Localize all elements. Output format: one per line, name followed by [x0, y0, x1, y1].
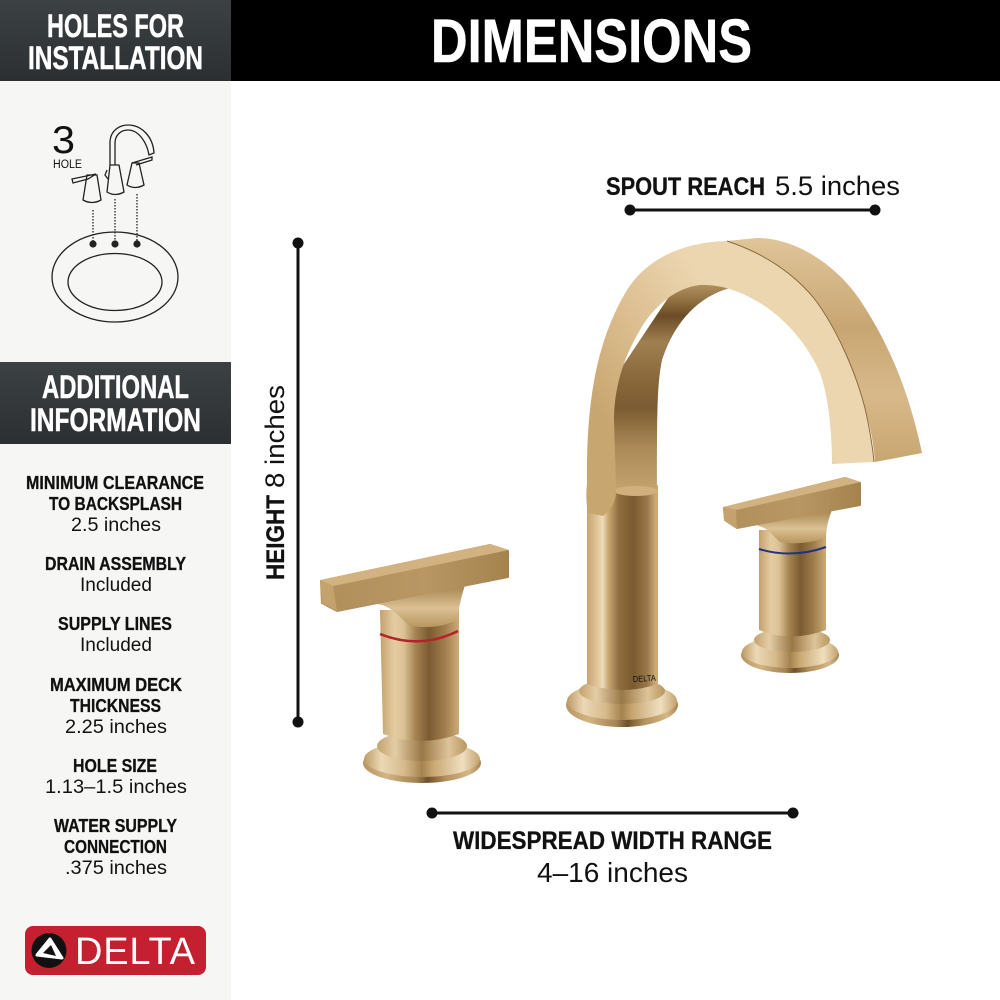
hot handle column: [380, 610, 459, 741]
spec: water supply connection: .375 inches: [65, 858, 167, 879]
spec: drain assembly: Included: [80, 575, 152, 596]
spec: minimum clearance: TO BACKSPLASH: [49, 494, 182, 514]
faucet: hot handle: [320, 544, 509, 783]
title: dimensions: [231, 0, 1000, 81]
hot handle red ring: [380, 631, 458, 641]
base of spout: [566, 678, 678, 727]
spout ridge line: [727, 241, 874, 462]
cold handle base: [741, 628, 839, 673]
spec: maximum deck thickness: THICKNESS: [70, 696, 161, 716]
dimension: widespread width range: 4–16 inches: [537, 857, 688, 888]
spec: minimum clearance: [26, 473, 204, 536]
spec: water supply connection: [54, 816, 177, 879]
spec: supply lines: [58, 614, 172, 656]
dimension: spout reach: SPOUT REACH: [606, 173, 765, 201]
spec: drain assembly: DRAIN ASSEMBLY: [45, 554, 186, 574]
logo: delta: [25, 926, 206, 975]
column collar: [614, 486, 658, 496]
hot handle bar end cap: [320, 580, 337, 611]
spec: drain assembly: [45, 554, 186, 596]
title: dimensions: DIMENSIONS: [431, 7, 752, 75]
column logo: DELTA: [633, 673, 656, 684]
spec: water supply connection: WATER SUPPLY: [54, 816, 177, 836]
spout front face: [586, 241, 874, 516]
dimension: height: [260, 238, 304, 728]
spec: hole size: HOLE SIZE: [73, 756, 157, 776]
faucet: center spout: [566, 238, 922, 727]
dimension: spout reach: 5.5 inches: [775, 171, 900, 201]
spec: hole size: 1.13–1.5 inches: [45, 777, 187, 798]
spout back face: [727, 238, 922, 462]
cold handle bar top face: [723, 477, 861, 510]
left sidebar panel: [0, 81, 231, 1000]
dimension: height: HEIGHT: [262, 495, 290, 580]
dimension: height: 8 inches: [260, 385, 290, 488]
hot handle bar top face: [320, 544, 509, 586]
spec: hole size: [45, 756, 187, 798]
header: additional information: ADDITIONAL: [42, 369, 189, 405]
dimension: widespread width range: WIDESPREAD WIDTH RANGE: [453, 827, 772, 855]
cold handle bar end cap: [723, 507, 737, 529]
spec: maximum deck thickness: MAXIMUM DECK: [50, 675, 182, 695]
spec: minimum clearance: MINIMUM CLEARANCE: [26, 473, 204, 493]
dimension: widespread width range: [426, 808, 798, 888]
cold handle blue ring: [759, 547, 826, 554]
spec: maximum deck thickness: 2.25 inches: [65, 717, 167, 738]
spec: supply lines: Included: [80, 635, 152, 656]
icon: three hole faucet over basin: 3: [52, 119, 75, 162]
cold handle column: [759, 530, 826, 636]
faucet: cold handle: [723, 477, 861, 673]
header: additional information: INFORMATION: [30, 402, 201, 438]
spec: supply lines: SUPPLY LINES: [58, 614, 172, 634]
icon: three hole faucet over basin: [52, 119, 178, 322]
hot handle top bar: [321, 545, 508, 611]
cold handle top bar: [724, 478, 860, 528]
hot handle neck: [377, 585, 465, 627]
header: holes for installation: INSTALLATION: [28, 40, 203, 76]
spec: water supply connection: CONNECTION: [64, 837, 167, 857]
header: additional information: [0, 362, 231, 444]
spout underside: [600, 280, 730, 490]
logo: delta: DELTA: [75, 931, 196, 973]
icon: three hole faucet over basin: HOLE: [53, 159, 82, 171]
spout column: [587, 485, 658, 690]
spec: maximum deck thickness: [50, 675, 182, 738]
dimension: spout reach: [606, 171, 900, 216]
header: holes for installation: [0, 0, 231, 81]
hot handle base: [363, 731, 481, 783]
header: holes for installation: HOLES FOR: [47, 8, 184, 44]
cold handle neck: [758, 510, 832, 543]
spec: minimum clearance: 2.5 inches: [71, 515, 161, 536]
